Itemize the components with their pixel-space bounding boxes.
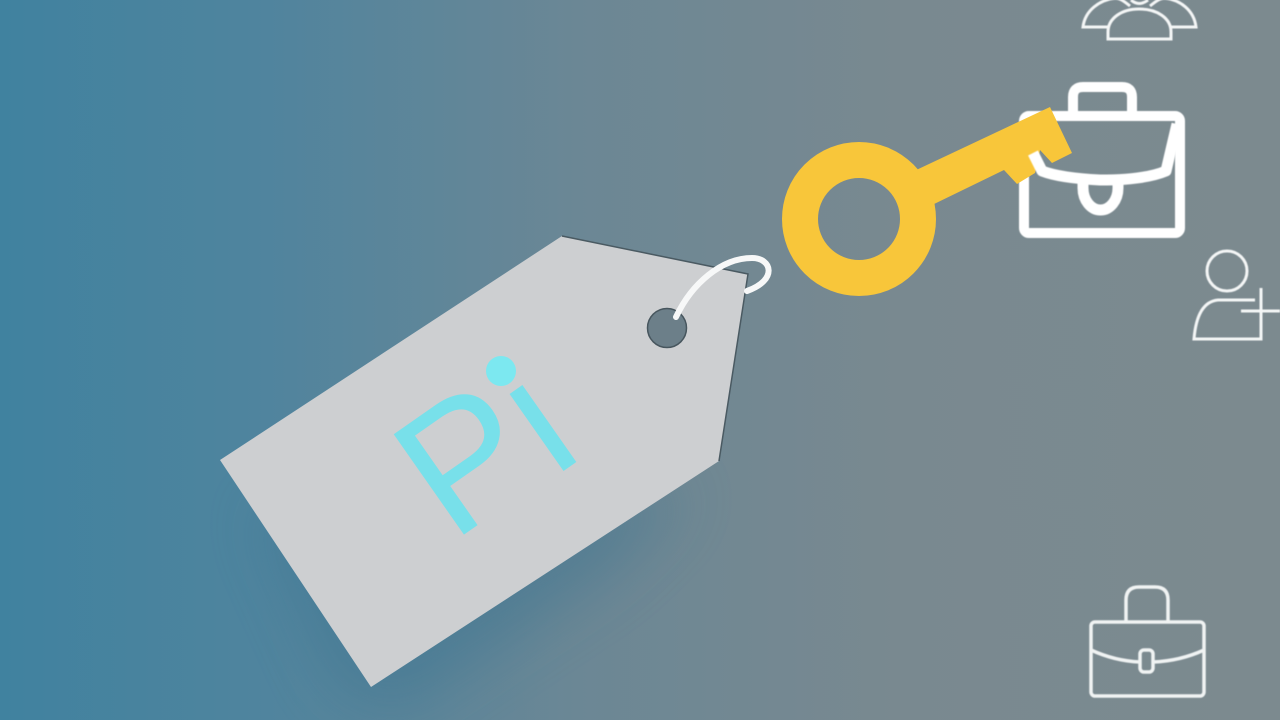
left person (1083, 0, 1130, 27)
small briefcase body (1091, 622, 1204, 696)
small briefcase handle (1126, 587, 1168, 621)
small briefcase clasp (1140, 650, 1153, 672)
user head (1207, 251, 1247, 291)
small briefcase flap (1091, 650, 1204, 662)
tag label Pi: P (360, 345, 568, 574)
briefcase clasp (1083, 182, 1118, 210)
large briefcase frame and handle (1024, 87, 1180, 233)
key ring (800, 160, 918, 278)
icon: small briefcase (1091, 587, 1204, 696)
tag string loop (676, 258, 769, 317)
briefcase handle (1073, 87, 1132, 114)
top head (1131, 0, 1148, 4)
front person (1108, 9, 1171, 39)
tag shadow (260, 490, 690, 710)
tag dark edge (562, 236, 748, 461)
large briefcase flap and clasp (1033, 124, 1177, 210)
tag body (220, 236, 748, 687)
round dot of the i (486, 356, 516, 386)
briefcase flap (1033, 124, 1177, 180)
key shaft and bit (912, 107, 1072, 206)
briefcase body (1024, 116, 1180, 233)
tag hole (648, 308, 686, 348)
key (800, 107, 1072, 278)
icon: add user (1194, 251, 1280, 339)
right person (1150, 0, 1196, 27)
user body (1194, 288, 1261, 339)
icon: group of people (1083, 0, 1196, 39)
price tag with Pi label (220, 236, 748, 687)
tag label Pi: i (461, 326, 605, 509)
plus bar (1241, 310, 1280, 312)
